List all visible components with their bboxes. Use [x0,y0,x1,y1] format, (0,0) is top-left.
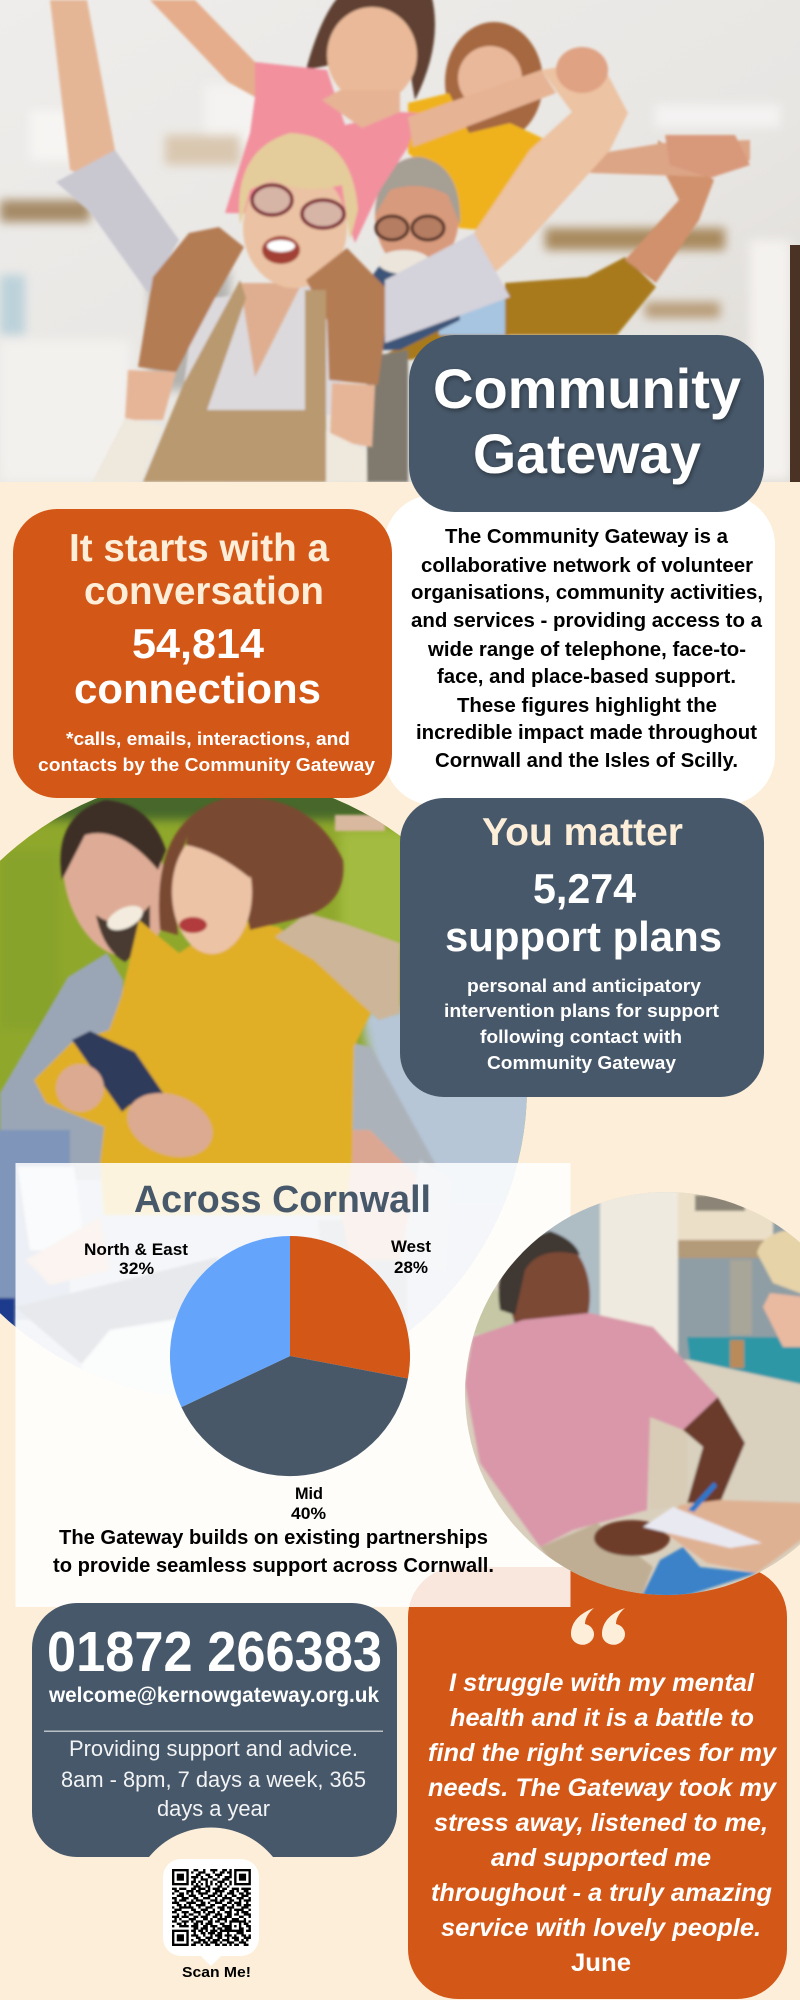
label: Mid: 40% [291,1505,326,1523]
heading: Community Gateway: Community [433,357,741,420]
label: Mid [291,1485,326,1523]
quote text: health and it is a battle to [450,1704,754,1732]
quote text: needs. The Gateway took my [428,1774,777,1802]
intro text: Cornwall and the Isles of Scilly. [435,749,738,772]
heading: You matter: You matter [482,811,683,854]
partnership text [53,1527,494,1577]
partnership text: to provide seamless support across Cornwall. [53,1555,494,1577]
heading: Across Cornwall: Across Cornwall [134,1178,431,1220]
stat: 54,814 connections: connections [74,665,321,712]
email address: welcome@kernowgateway.org.uk [48,1684,379,1707]
intro text [411,525,763,772]
intro text: face, and place-based support. [437,665,736,688]
description: intervention plans for support [444,1001,719,1021]
man's head [511,1250,592,1324]
phone number: 01872 266383 [47,1620,382,1684]
apron [143,280,326,482]
footnote: *calls, emails, interactions, and [66,729,350,749]
pink girl [150,0,255,97]
phone and hands [72,1031,172,1112]
panel: connections [13,509,392,798]
Scan Me label: Scan Me! [182,1965,251,1981]
stat: 54,814 connections [74,620,321,712]
grandmother's body [184,286,342,414]
girl's head [159,797,343,935]
partnership text: The Gateway builds on existing partnerships [59,1527,488,1549]
photo: father and daughter with phone [0,798,527,1368]
stat: 5,274 support plans: 5,274 [533,865,637,912]
label: West [391,1238,432,1277]
quote text [428,1669,777,1942]
panel: support plans [400,798,764,1097]
woman's hair and face [757,1228,800,1295]
footnote [38,729,375,775]
heading: Community Gateway [433,357,741,485]
quote text: find the right services for my [428,1739,777,1767]
photo: man talking with support worker [460,1190,800,1600]
quote text: throughout - a truly amazing [431,1879,772,1907]
opening hours: days a year [157,1796,270,1821]
icon: quote marks [571,1608,625,1645]
description [444,976,719,1073]
quote attribution: June [571,1949,631,1977]
label: North & East: 32% [119,1260,154,1278]
heading: It starts with a conversation: It starts with a [69,527,330,570]
pie chart [170,1236,410,1476]
yellow-shirt girl [445,22,543,142]
intro text: organisations, community activities, [411,581,763,604]
panel: title [409,335,764,512]
intro text: incredible impact made throughout [416,721,757,744]
man's hoodie [0,953,123,1180]
heading: Community Gateway: Gateway [473,422,701,485]
label: North & East: North & East [84,1241,189,1259]
grandmother's raised arms [50,0,115,178]
woman's arm and notebook [657,1500,800,1573]
description: personal and anticipatory [467,976,701,996]
intro text: These figures highlight the [457,694,717,717]
photo: family playing in kitchen [0,0,800,482]
quote text: service with lovely people. [441,1914,761,1942]
panel: intro description [384,495,775,805]
quote text: I struggle with my mental [449,1669,755,1697]
label: North & East [84,1241,189,1278]
description: following contact with [480,1027,682,1047]
description: Community Gateway [487,1053,676,1073]
trousers [540,1523,653,1600]
sofa [686,1358,800,1503]
faded lower area [18,1167,74,1250]
heading: It starts with a conversation: conversation [84,570,324,613]
girl's jacket [34,920,371,1215]
greenery behind man [474,1288,514,1334]
stat: 54,814 connections: 54,814 [132,620,265,667]
opening hours [61,1736,366,1821]
label: Mid: Mid [295,1485,323,1503]
intro text: wide range of telephone, face-to- [427,638,746,661]
opening hours: Providing support and advice. [69,1736,358,1761]
intro text: The Community Gateway is a [445,525,729,548]
panel: contact [32,1603,397,1857]
girl's legs [138,227,244,372]
arm [683,1397,745,1503]
stat: 5,274 support plans [445,865,722,960]
quote text: and supported me [491,1844,711,1872]
husband's head [372,265,462,352]
stat: 5,274 support plans: support plans [445,913,722,960]
footnote: contacts by the Community Gateway [38,755,375,775]
panel: Across Cornwall [16,1163,570,1607]
quote text: stress away, listened to me, [434,1809,768,1837]
intro text: and services - providing access to a [411,609,763,632]
QR code [163,1859,259,1966]
panel: testimonial [408,1567,787,1999]
shirt [465,1313,718,1547]
label: West: West [391,1238,432,1256]
opening hours: 8am - 8pm, 7 days a week, 365 [61,1767,366,1792]
label: West: 28% [394,1259,428,1277]
heading: It starts with a conversation [69,527,330,613]
man's head [62,831,165,956]
intro text: collaborative network of volunteer [421,554,753,577]
sweater and husband [505,257,656,335]
